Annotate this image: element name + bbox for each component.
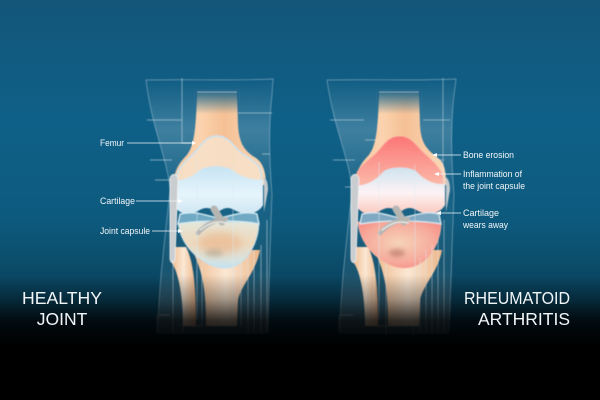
tibia and fibula	[171, 247, 260, 326]
tibia and fibula	[353, 247, 442, 326]
label: Cartilage: Cartilage	[100, 196, 135, 207]
meniscus band	[178, 213, 259, 224]
label: Cartilage	[100, 196, 183, 207]
heading: healthy joint	[22, 288, 102, 329]
label: Inflammation of the joint capsule: the joint capsule	[463, 181, 525, 192]
label: Joint capsule: Joint capsule	[100, 226, 150, 237]
lower capsule with tibia head	[178, 222, 259, 268]
bone and tendon guide lines	[147, 78, 272, 333]
leg outline	[146, 79, 273, 333]
meniscus band	[360, 213, 441, 224]
label: Cartilage wears away	[436, 208, 508, 231]
illustration: rheumatoid knee joint	[327, 78, 456, 337]
heading: healthy joint: JOINT	[37, 309, 88, 329]
heading: rheumatoid arthritis: ARTHRITIS	[478, 309, 570, 329]
label: Femur	[100, 138, 196, 149]
label: Joint capsule	[100, 226, 183, 237]
tendons	[351, 174, 450, 262]
label: Cartilage wears away: wears away	[462, 220, 508, 231]
bottom shadow fade	[0, 275, 600, 345]
femur	[355, 90, 446, 185]
illustration: healthy knee joint	[146, 78, 273, 333]
bone and tendon guide lines	[330, 78, 450, 337]
ligaments	[380, 209, 408, 233]
tendons	[170, 174, 268, 262]
heading: healthy joint: HEALTHY	[22, 288, 102, 308]
leg outline	[327, 79, 456, 333]
cartilage femoral	[174, 166, 263, 214]
bottom black band	[0, 345, 600, 400]
label: Inflammation of the joint capsule: Inflammation of	[463, 169, 522, 180]
ligaments	[198, 209, 226, 233]
inflamed capsule upper	[356, 136, 444, 190]
label: Femur: Femur	[100, 138, 124, 149]
heading: rheumatoid arthritis	[464, 288, 570, 329]
label: Inflammation of the joint capsule	[434, 169, 525, 192]
label: Cartilage wears away: Cartilage	[463, 208, 499, 219]
joint capsule upper	[176, 136, 262, 184]
label: Bone erosion	[432, 150, 514, 161]
inflamed lower capsule with tibia head	[358, 222, 441, 268]
femur	[173, 90, 266, 185]
label: Bone erosion: Bone erosion	[463, 150, 514, 161]
cartilage femoral	[356, 168, 445, 214]
heading: rheumatoid arthritis: RHEUMATOID	[464, 288, 570, 308]
